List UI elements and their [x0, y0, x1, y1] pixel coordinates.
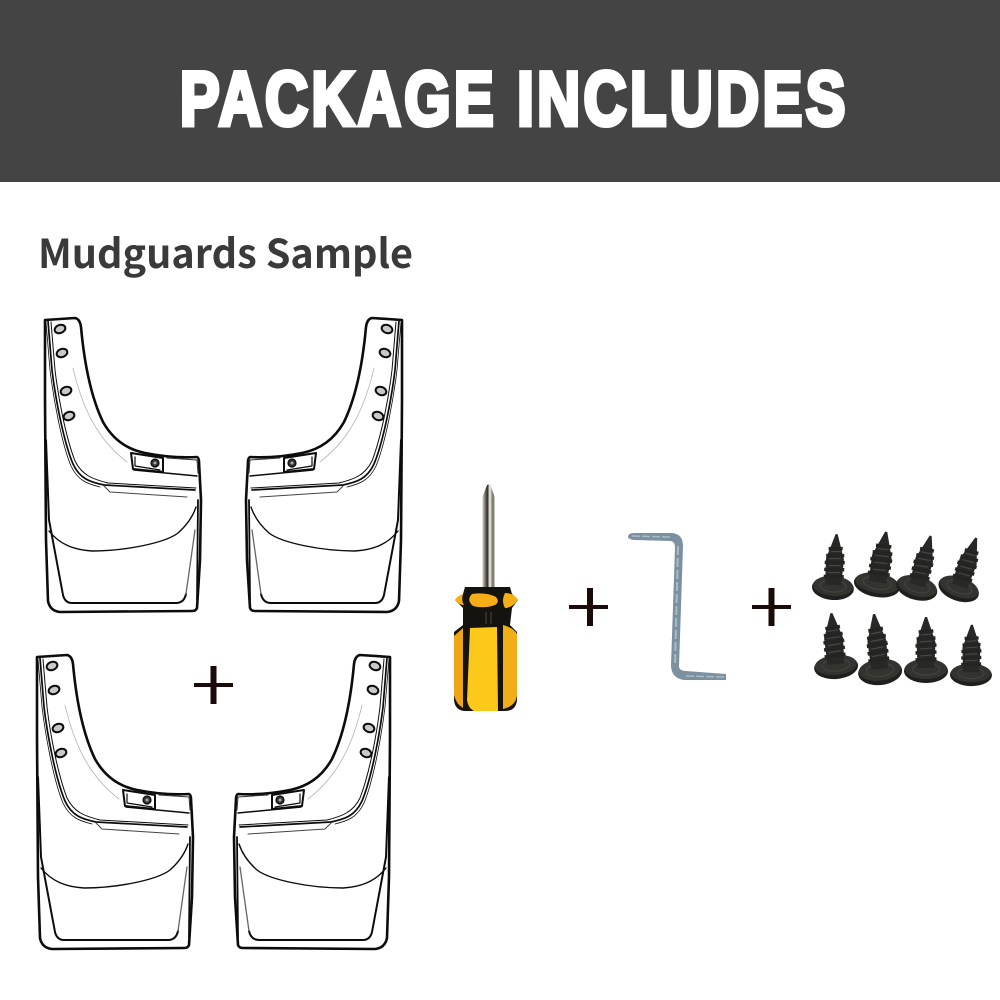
icon: screws — [809, 528, 996, 687]
plus sign: screwdriver to hex key — [569, 588, 608, 626]
subheading: Mudguards Sample — [38, 222, 413, 280]
mudguard: top right — [246, 318, 402, 612]
mudguard: bottom left — [37, 655, 193, 949]
plus sign: between mudguards — [194, 666, 233, 704]
title: PACKAGE INCLUDES — [180, 57, 845, 142]
icon: screwdriver — [454, 484, 518, 711]
mudguard: bottom right — [234, 655, 390, 949]
header banner — [0, 0, 1000, 182]
plus sign: hex key to screws — [752, 588, 791, 626]
icon: hex key — [628, 533, 726, 680]
mudguard: top left — [45, 318, 201, 612]
